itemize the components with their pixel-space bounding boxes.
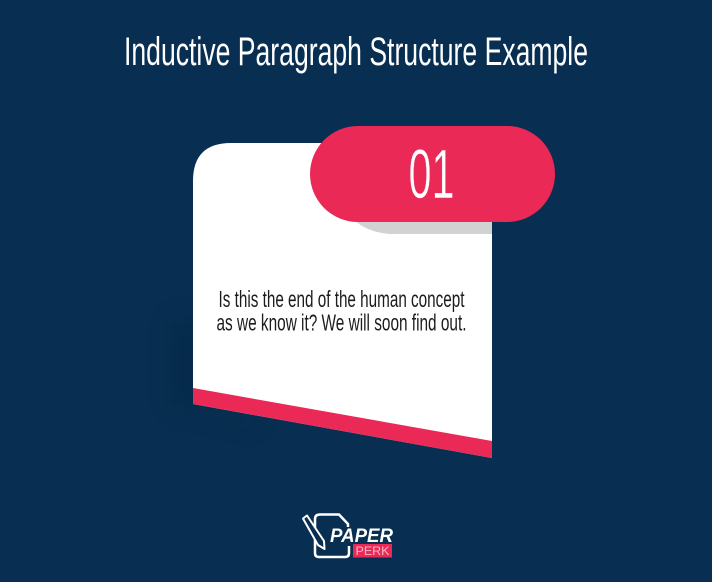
wordmark: PAPER: PAPER [330,525,393,547]
card body [193,143,492,458]
body text: as we know it? We will soon find out. [216,310,466,336]
body text [216,286,466,336]
icon: document and pencil [303,514,349,557]
number pill [310,126,555,222]
panel: card [172,126,555,458]
logo: Paper Perk [303,514,393,558]
card bottom stripe [193,388,492,458]
body text: Is this the end of the human concept [218,286,465,312]
wordmark: PERK: PERK [356,544,390,558]
pill shadow [356,222,492,234]
number pill: 01 [408,135,454,213]
